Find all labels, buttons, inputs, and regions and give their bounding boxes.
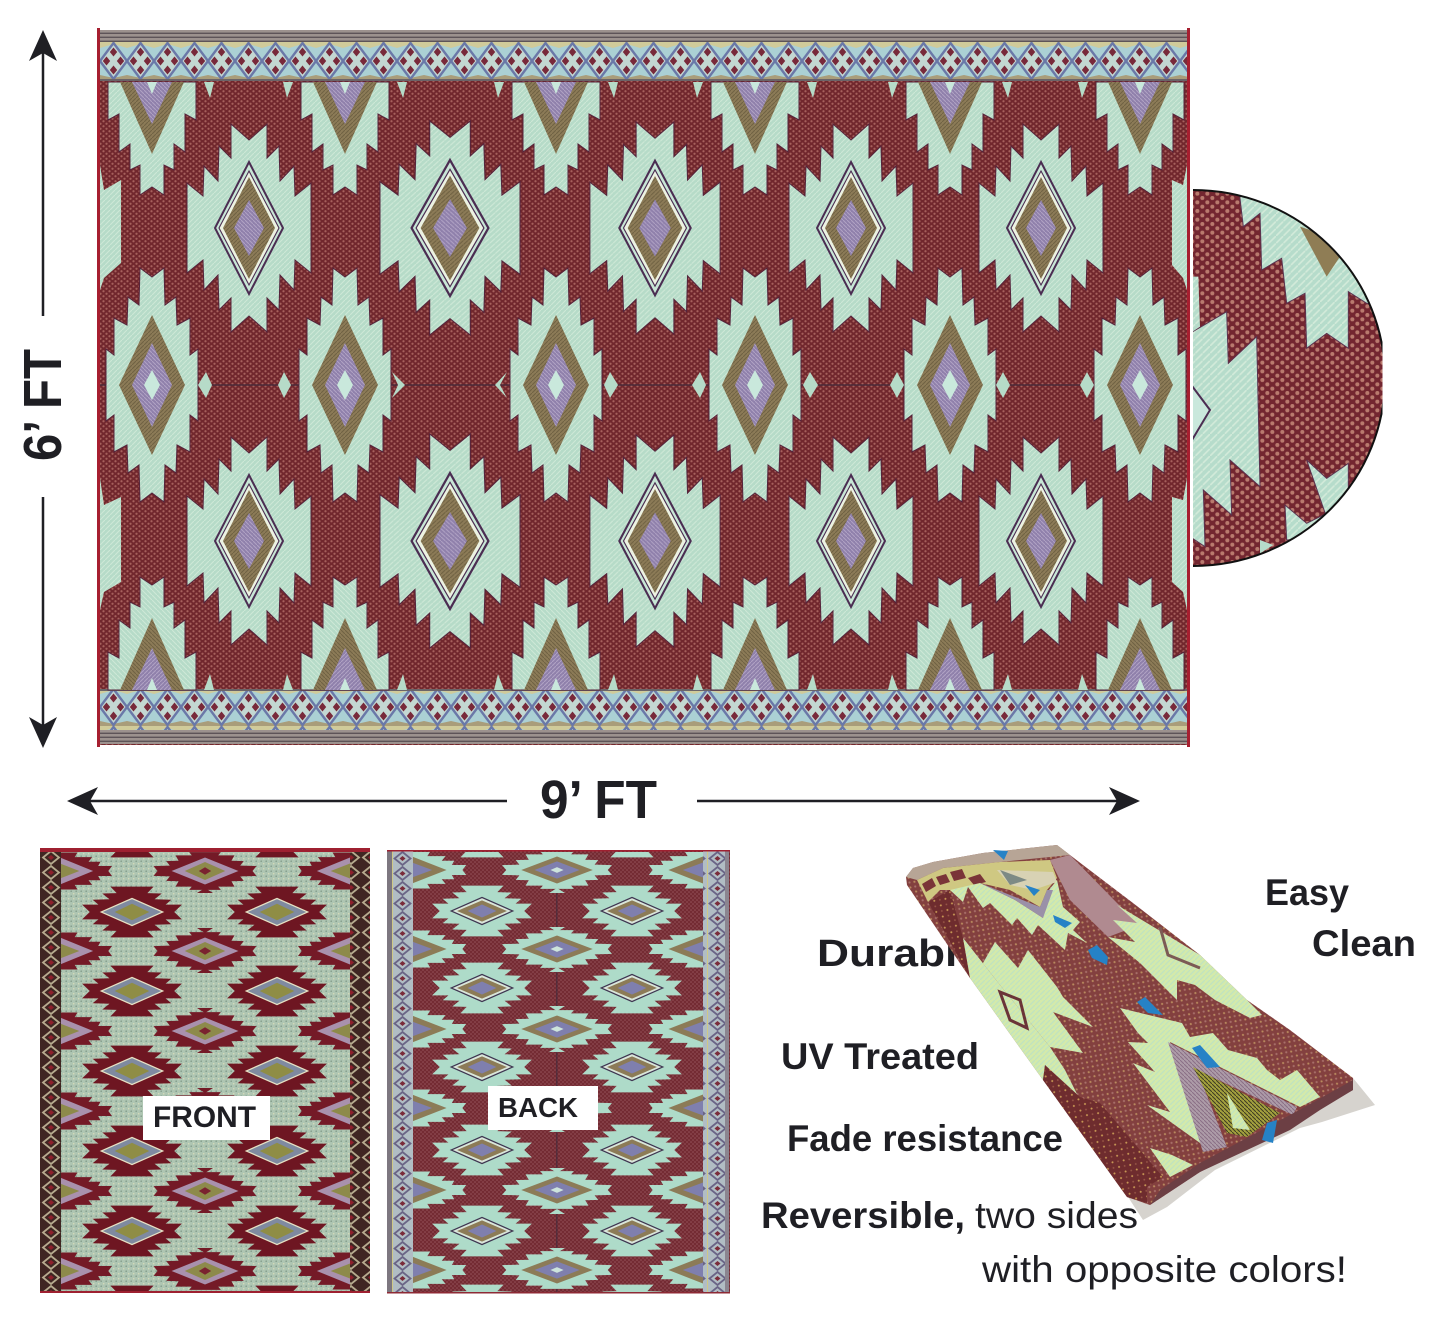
- front top and bottom edges: [40, 848, 370, 1293]
- feature: uv treated: UV Treated: [781, 1036, 979, 1077]
- mint right: [1108, 905, 1262, 1018]
- feature: easy clean: [1265, 872, 1416, 964]
- diamond outline right: [1160, 927, 1200, 968]
- feature: easy clean: Clean: [1312, 923, 1416, 964]
- dark dotted fold lower: [1043, 1065, 1163, 1203]
- width label: 9’ FT: [540, 770, 657, 830]
- front side rug: [40, 848, 370, 1293]
- height dimension arrow: [29, 30, 57, 748]
- mint side face: [963, 938, 1080, 1107]
- feature: reversible: with opposite colors!: [981, 1249, 1347, 1290]
- layered rolled edge: [1150, 1080, 1353, 1205]
- seam line: [100, 384, 1187, 386]
- front label: [143, 1096, 270, 1140]
- magnified weave detail: [1193, 189, 1382, 567]
- back side rug: [387, 850, 730, 1294]
- mint zigzag upper: [950, 880, 1087, 950]
- magnifier outline: [1193, 190, 1385, 566]
- plastic wrap end: [1128, 1078, 1375, 1220]
- plastic sheen on top end: [1050, 855, 1140, 937]
- width dimension arrow: [67, 787, 1140, 815]
- side face motif: [1000, 992, 1027, 1028]
- bottom half motifs: [90, 577, 1202, 690]
- lilac band lower: [1168, 1042, 1297, 1152]
- lilac diamond band: [980, 883, 1053, 918]
- bottom border: [100, 689, 1187, 744]
- feature: durable: Durable: [817, 933, 982, 975]
- back side borders: [387, 850, 730, 1294]
- mint main left: [963, 938, 1093, 1053]
- mint lower small: [1150, 1148, 1193, 1177]
- back label: [488, 1086, 598, 1130]
- bundle body: [906, 845, 1353, 1205]
- back label: BACK: [498, 1092, 578, 1123]
- front label: FRONT: [153, 1101, 256, 1134]
- seam side ticks: [198, 372, 1094, 398]
- top half motifs: [90, 82, 1202, 195]
- rug field: [100, 30, 1187, 745]
- feature: reversible: Reversible,: [761, 1195, 965, 1236]
- mint spike in olive: [1227, 1093, 1250, 1130]
- red side bindings: [97, 28, 1190, 747]
- large medallions lower row: [187, 434, 1103, 648]
- feature: fade resistance: Fade resistance: [787, 1118, 1063, 1159]
- feature: reversible: two sides: [975, 1195, 1138, 1236]
- main rug: [90, 28, 1202, 747]
- back motifs: [413, 852, 703, 1292]
- mint lower large: [1120, 1008, 1320, 1148]
- feature: reversible: [761, 1195, 1347, 1290]
- large medallions upper row: [187, 121, 1103, 335]
- back seam: [556, 852, 558, 1293]
- end lattice band: [917, 860, 1057, 907]
- front side borders: [40, 849, 370, 1293]
- rolled rug in plastic wrap: [906, 845, 1375, 1220]
- centre row motifs: [106, 268, 1186, 502]
- edge slivers: [100, 165, 1187, 610]
- olive triangle: [1193, 1067, 1280, 1137]
- blue spots: [993, 850, 1277, 1143]
- height label: 6’ FT: [13, 349, 73, 461]
- dark dotted fold upper: [928, 890, 982, 978]
- feature: easy clean: Easy: [1265, 872, 1349, 913]
- top border: [100, 30, 1187, 81]
- front motifs: [61, 852, 350, 1291]
- motif pattern: [90, 82, 1202, 690]
- top rim: [906, 845, 1070, 880]
